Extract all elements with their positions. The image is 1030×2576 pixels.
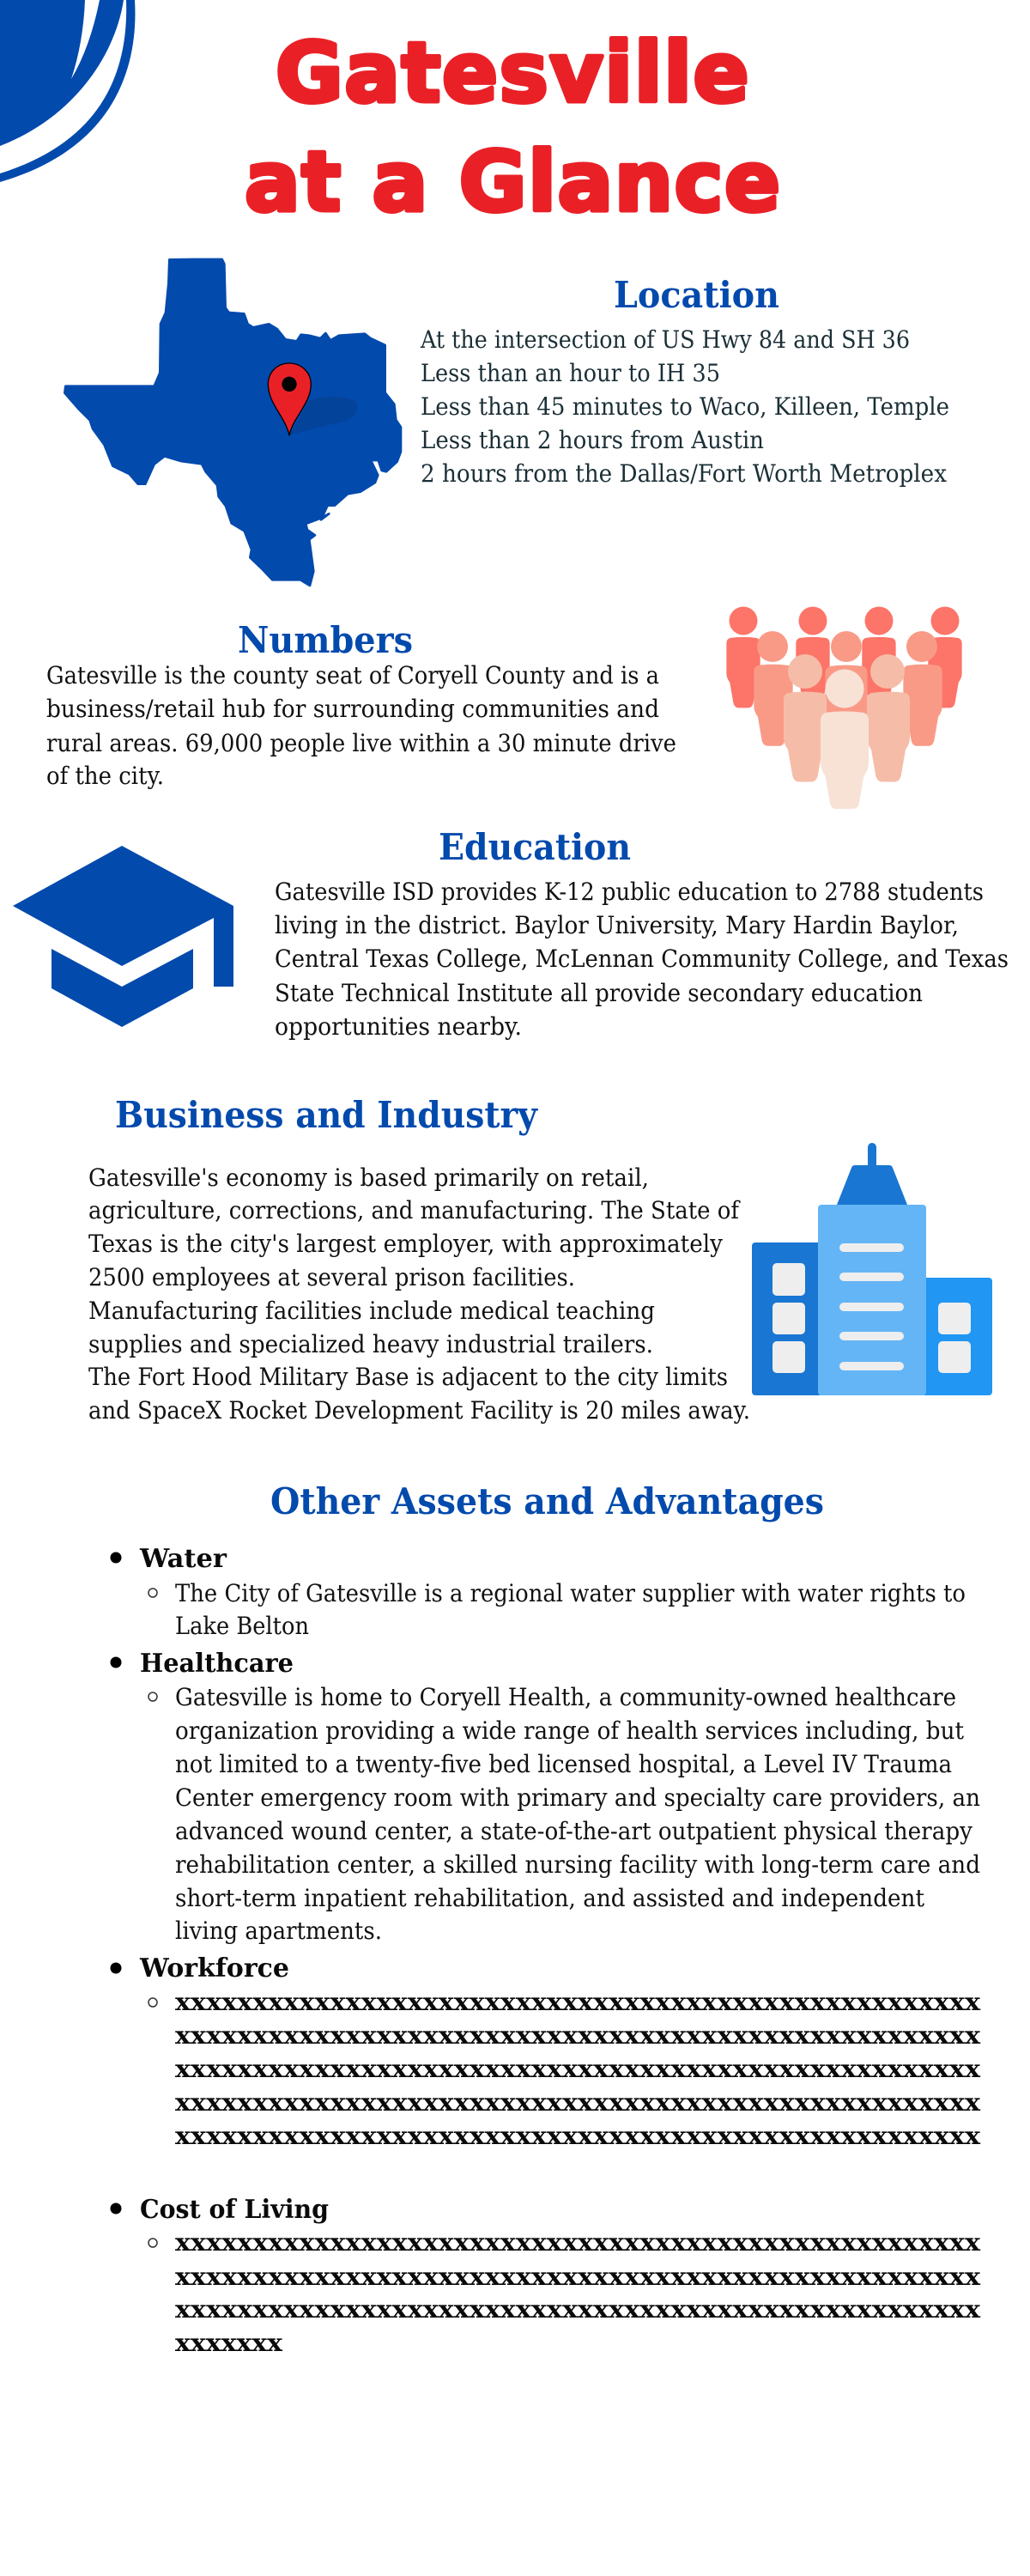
list: workforce: xxxxxxxxxxxxxxxxxxxxxxxxxxxxxxxxxxxxxxxxxxxxxxxxxxxx [175,1988,980,2016]
list: healthcare: rehabilitation center, a skilled nursing facility with long-term care and [175,1850,980,1879]
list: workforce: xxxxxxxxxxxxxxxxxxxxxxxxxxxxxxxxxxxxxxxxxxxxxxxxxxxx [175,2055,980,2083]
title [245,25,782,230]
text: location lines: 2 hours from the Dallas/Fort Worth Metroplex [421,459,947,488]
title: at a Glance [245,134,782,230]
list: workforce [110,1953,980,2150]
text: location lines: Less than 45 minutes to Waco, Killeen, Temple [421,392,949,421]
text: location lines: Less than an hour to IH 35 [421,359,720,387]
heading: numbers: Numbers [238,619,413,661]
list: cost of living [110,2195,980,2357]
list: healthcare: Center emergency room with primary and specialty care providers, an [175,1783,980,1812]
text: location lines [420,325,949,488]
text: business body: Texas is the city's largest employer, with approximately [88,1230,723,1258]
list: healthcare: Gatesville is home to Coryell Health, a community-owned healthcare [175,1683,956,1711]
text: numbers body: rural areas. 69,000 people live within a 30 minute drive [46,729,676,757]
icon: pin shadow [289,397,357,435]
text: numbers body: Gatesville is the county seat of Coryell County and is a [46,661,659,690]
text: business body: The Fort Hood Military Base is adjacent to the city limits [88,1363,728,1391]
text: education body: Gatesville ISD provides K-12 public education to 2788 students [275,878,984,906]
heading: location: Location [614,274,779,316]
list: workforce: xxxxxxxxxxxxxxxxxxxxxxxxxxxxxxxxxxxxxxxxxxxxxxxxxxxx [175,2088,980,2117]
text: location lines: At the intersection of US Hwy 84 and SH 36 [420,325,910,354]
list: cost of living: xxxxxxxxxxxxxxxxxxxxxxxxxxxxxxxxxxxxxxxxxxxxxxxxxxxx [175,2263,980,2291]
text: business body: agriculture, corrections, and manufacturing. The State of [88,1196,741,1224]
text: business body: and SpaceX Rocket Development Facility is 20 miles away. [88,1396,750,1425]
text: business body: supplies and specialized heavy industrial trailers. [88,1330,653,1358]
text: business body: Gatesville's economy is based primarily on retail, [88,1163,649,1192]
text: education body: living in the district. Baylor University, Mary Hardin Baylor, [275,911,959,939]
list: healthcare: not limited to a twenty-five bed licensed hospital, a Level IV Trauma [175,1750,952,1778]
icon: map pin [268,363,311,435]
list: water: The City of Gatesville is a regional water supplier with water rights to [175,1579,966,1607]
list: water [110,1544,966,1640]
text: business body: Manufacturing facilities include medical teaching [88,1297,655,1325]
list: water: Water [139,1544,227,1574]
title: Gatesville [276,25,750,121]
panel: business and industry [88,1094,750,1425]
panel: location [420,274,949,488]
logo: corner swoosh [0,0,135,182]
text: business body: 2500 employees at several prison facilities. [88,1263,575,1291]
heading: other assets and advantages: Other Assets and Advantages [270,1480,824,1522]
text: business body [88,1163,750,1425]
list: cost of living: xxxxxxxxxxxxxxxxxxxxxxxxxxxxxxxxxxxxxxxxxxxxxxxxxxxx [175,2228,980,2257]
text: numbers body: of the city. [46,762,164,790]
list: cost of living: xxxxxxxxxxxxxxxxxxxxxxxxxxxxxxxxxxxxxxxxxxxxxxxxxxxx [175,2295,980,2324]
text: education body: opportunities nearby. [275,1012,522,1041]
icon: Texas map with pin [64,259,401,586]
list: workforce: xxxxxxxxxxxxxxxxxxxxxxxxxxxxxxxxxxxxxxxxxxxxxxxxxxxx [175,2122,980,2150]
icon: graduation cap [13,846,233,1027]
list: healthcare: Healthcare [140,1649,294,1679]
list: healthcare [110,1649,980,1945]
text: location lines: Less than 2 hours from Austin [421,426,764,454]
heading: education: Education [439,826,631,868]
list: water: Lake Belton [175,1612,309,1640]
icon: office buildings [752,1143,992,1395]
list: cost of living: xxxxxxx [175,2329,282,2357]
heading: business and industry: Business and Industry [115,1094,538,1136]
text: numbers body [46,661,676,790]
list: workforce: Workforce [139,1953,289,1984]
list: cost of living: Cost of Living [140,2195,329,2225]
panel: numbers [46,619,676,790]
text: education body [275,878,1009,1041]
text: education body: State Technical Institute all provide secondary education [275,979,923,1007]
list: healthcare: advanced wound center, a state-of-the-art outpatient physical therapy [175,1817,972,1845]
list: workforce: xxxxxxxxxxxxxxxxxxxxxxxxxxxxxxxxxxxxxxxxxxxxxxxxxxxx [175,2021,980,2050]
list: healthcare: short-term inpatient rehabilitation, and assisted and independent [175,1884,925,1912]
list: healthcare: organization providing a wide range of health services including, but [175,1716,965,1745]
text: numbers body: business/retail hub for surrounding communities and [46,695,659,723]
icon: group of people [726,606,962,809]
panel: education [275,826,1009,1041]
list: healthcare: living apartments. [175,1917,382,1945]
